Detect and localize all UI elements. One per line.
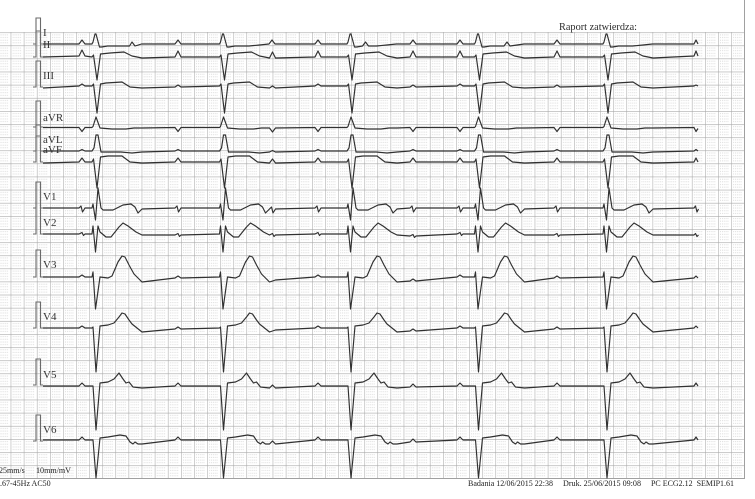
footer: gain: 10mm/mV xyxy=(36,466,71,475)
lead V6 xyxy=(33,415,698,478)
trace II xyxy=(43,50,698,80)
calibration pulse I xyxy=(33,18,43,44)
trace V5 xyxy=(43,373,698,430)
calibration pulse V5 xyxy=(33,359,43,385)
lead V4 xyxy=(33,302,698,372)
calibration pulse V2 xyxy=(33,182,43,234)
calibration pulse aVR xyxy=(33,101,43,127)
trace aVL xyxy=(43,135,698,153)
label V1: V1 xyxy=(43,191,56,203)
trace V2 xyxy=(43,223,698,252)
lead I xyxy=(33,18,698,47)
lead aVF xyxy=(33,136,698,188)
label aVL: aVL xyxy=(43,134,63,146)
lead aVR xyxy=(33,101,698,132)
calibration pulse III xyxy=(33,61,43,87)
calibration pulse V6 xyxy=(33,415,43,441)
label V3: V3 xyxy=(43,259,57,271)
trace V4 xyxy=(43,313,698,372)
label V2: V2 xyxy=(43,217,56,229)
lead V2 xyxy=(33,182,698,252)
lead II xyxy=(33,31,698,80)
lead V5 xyxy=(33,359,698,430)
trace aVR xyxy=(43,117,698,132)
lead aVL xyxy=(33,125,698,153)
label aVR: aVR xyxy=(43,112,64,124)
calibration pulse aVL xyxy=(33,125,43,151)
calibration pulse aVF xyxy=(33,136,43,162)
calibration pulse V1 xyxy=(33,182,43,208)
label V5: V5 xyxy=(43,369,57,381)
calibration pulse V3 xyxy=(33,250,43,277)
trace V6 xyxy=(43,435,698,478)
lead III xyxy=(33,61,698,113)
trace V1 xyxy=(43,188,698,220)
trace V3 xyxy=(43,256,698,309)
trace I xyxy=(43,34,698,47)
label V4: V4 xyxy=(43,311,57,323)
calibration pulse V4 xyxy=(33,302,43,328)
lead V1 xyxy=(33,182,698,220)
label II: II xyxy=(43,39,51,51)
footer: print date: Druk. 25/06/2015 09:08 xyxy=(563,479,641,488)
footer: software version: PC ECG2.12 SEMIP1.61 xyxy=(651,479,734,488)
label I: I xyxy=(43,27,47,39)
lead V3 xyxy=(33,250,698,309)
footer: examination date: Badania 12/06/2015 22:38 xyxy=(468,479,553,488)
trace aVF xyxy=(43,156,698,188)
calibration pulse II xyxy=(33,31,43,57)
label III: III xyxy=(43,70,54,82)
label aVF: aVF xyxy=(43,144,62,156)
label V6: V6 xyxy=(43,424,57,436)
trace III xyxy=(43,82,698,113)
heading: report approval: Raport zatwierdza: xyxy=(559,22,637,33)
